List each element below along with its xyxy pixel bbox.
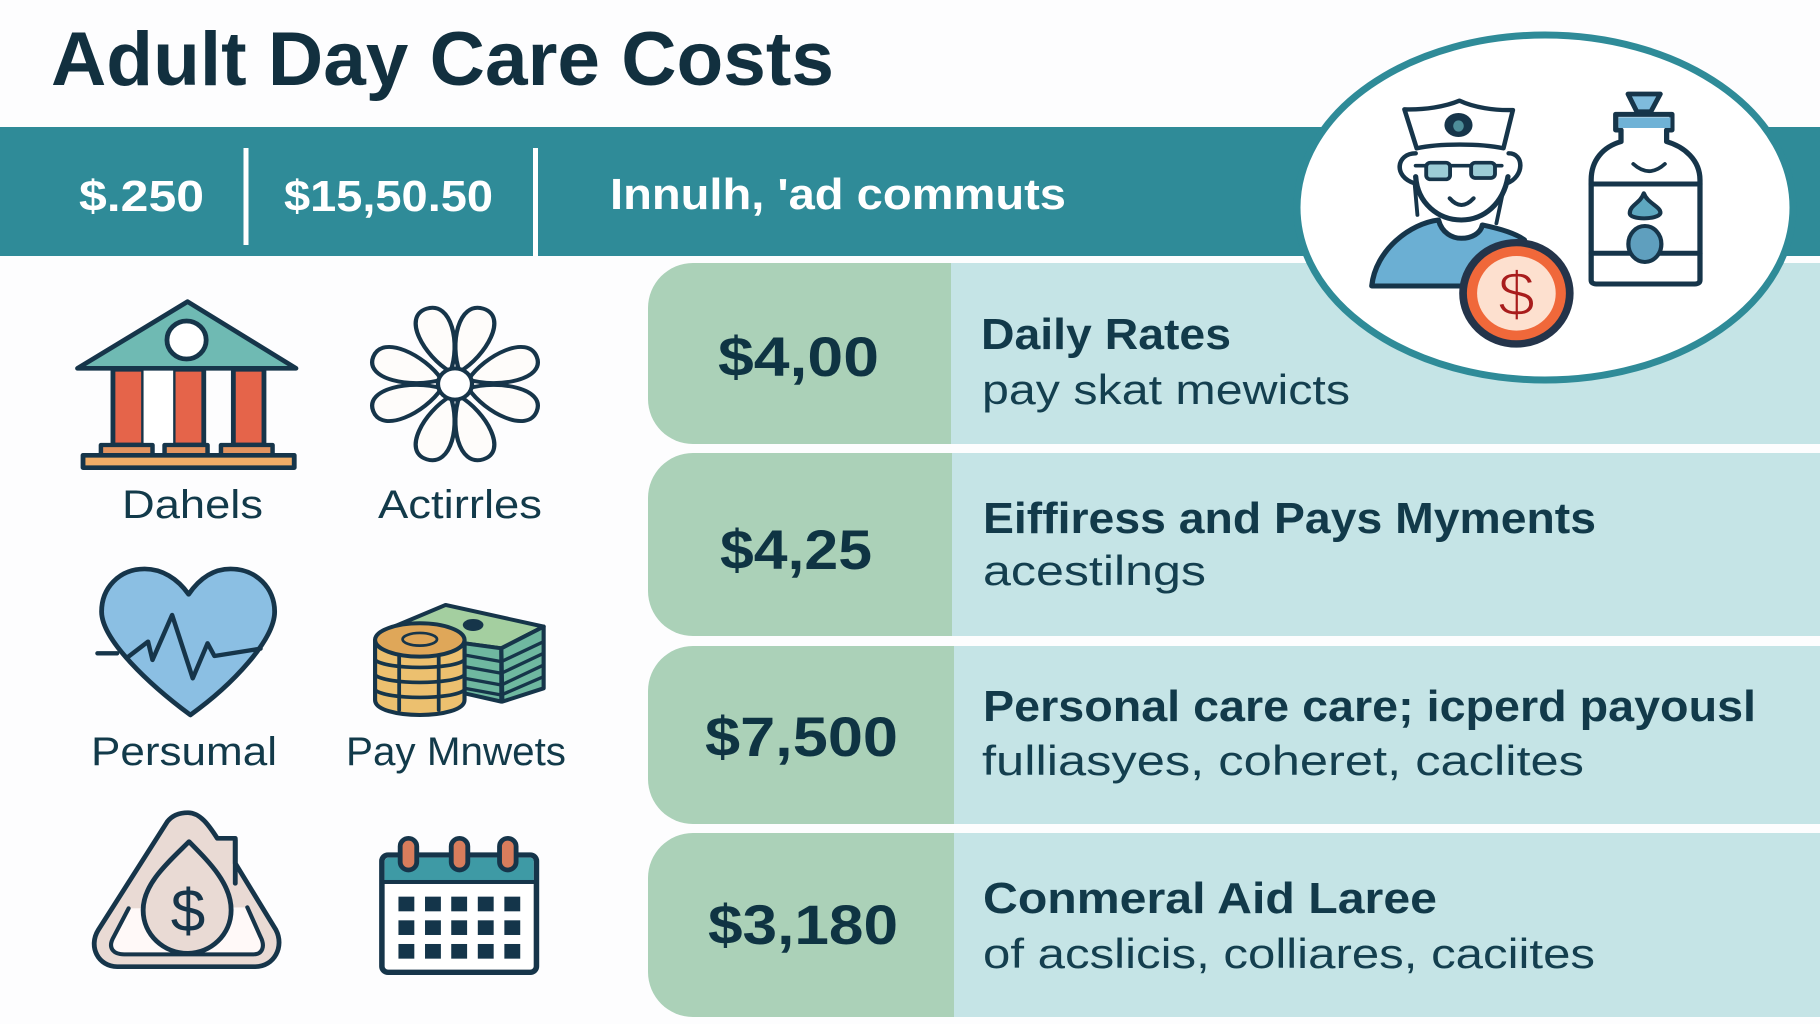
label: Dahels: Dahels [122,483,263,527]
row 2 heading: Eiffiress and Pays Myments [983,494,1596,543]
icon: coins and cash stack [375,605,544,715]
row 3 heading: Personal care care; icperd payousl [983,682,1756,731]
icon: heart with pulse [97,569,275,715]
band text: Innulh, 'ad commuts [610,170,1066,219]
row 4 description: of acslicis, colliares, caciites [983,930,1595,977]
label: Persumal: Persumal [91,730,277,774]
label: Actirrles: Actirrles [378,483,542,527]
row 1 amount: $4,00 [718,325,879,388]
row 2 description: acestilngs [983,547,1206,594]
icon: caregiver with cap [1372,101,1524,286]
row 4 heading: Conmeral Aid Laree [983,874,1437,923]
header band [0,127,1820,256]
title: Adult Day Care Costs [51,17,834,102]
cost row 1 [648,263,1820,444]
icon: flower [367,304,543,464]
cost row 4 [648,833,1820,1017]
band stat: first value: $.250 [79,172,204,221]
icon: dollar coin: $ [1498,259,1535,330]
row 1 description: pay skat mewicts [982,366,1350,413]
row 3 description: fulliasyes, coheret, caclites [982,737,1584,784]
cost row 3 [648,646,1820,824]
row 4 amount: $3,180 [708,893,898,956]
icon: dollar drop in triangle: $ [171,877,205,944]
band stat: second value: $15,50.50 [284,172,493,221]
label: Pay Mnwets: Pay Mnwets [346,730,566,774]
icon: medicine bottle [1591,94,1700,284]
row 3 amount: $7,500 [705,705,898,768]
cost row 2 [648,453,1820,636]
row 1 heading: Daily Rates [981,310,1231,359]
icon: dollar drop in triangle [94,813,279,967]
row 2 amount: $4,25 [720,518,872,581]
hero medallion [1297,35,1793,380]
icon: dollar coin [1463,243,1570,344]
icon: columned building [78,302,296,468]
icon: calendar [382,838,536,972]
